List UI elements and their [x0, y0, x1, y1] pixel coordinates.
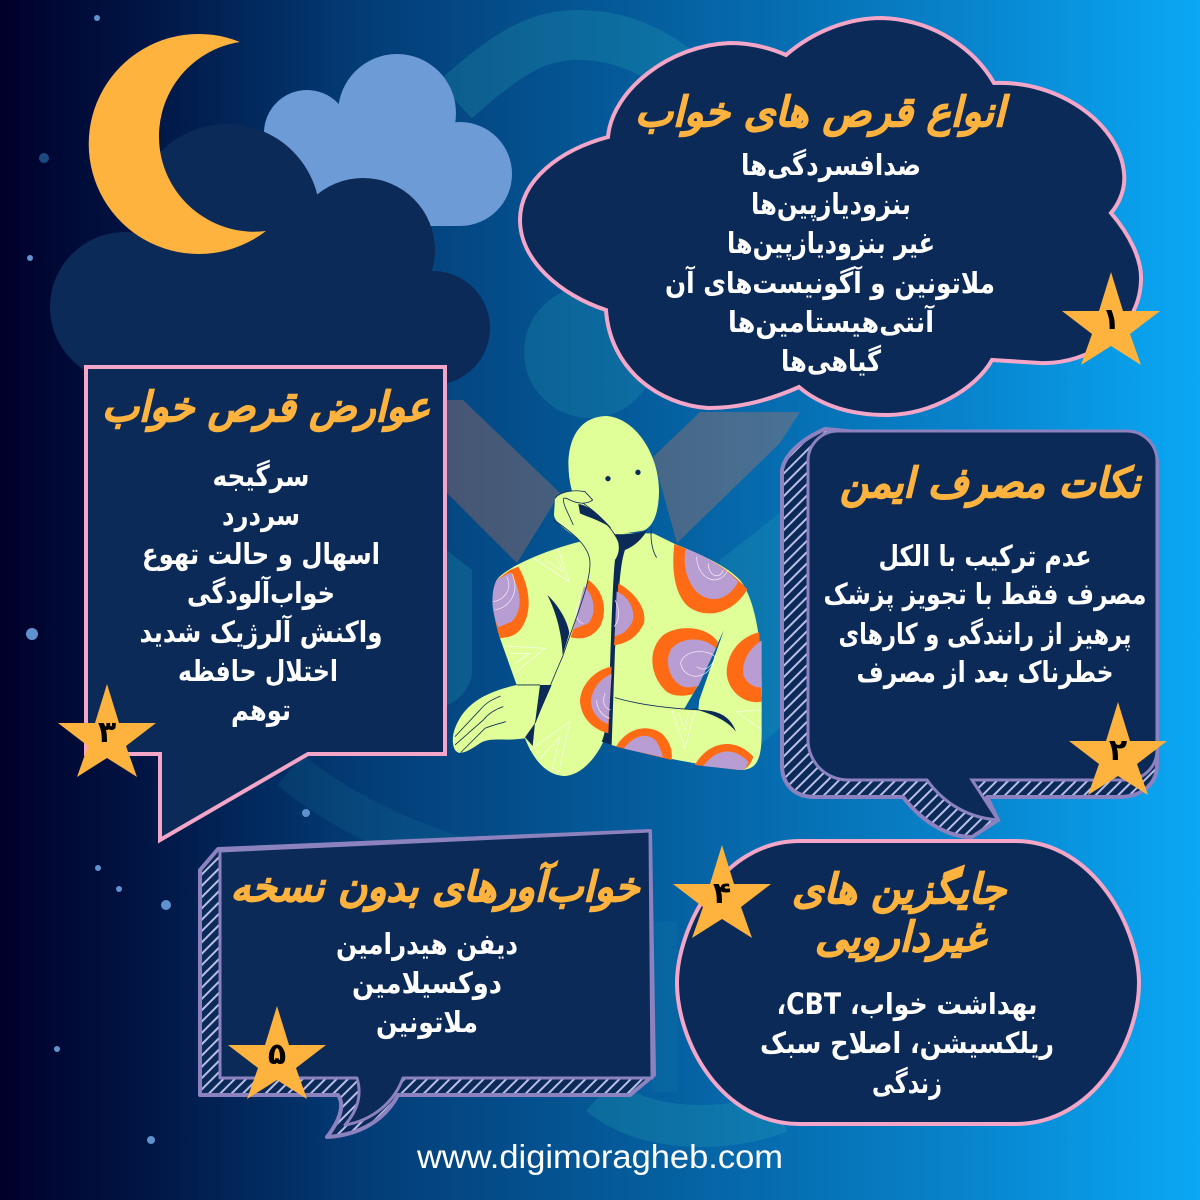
description: بهداشت خواب، CBT،	[776, 987, 1038, 1021]
star badge 5	[228, 1006, 326, 1099]
star badge 5: ۵	[268, 1037, 286, 1072]
faint logo shapes	[455, 35, 780, 1126]
heading: جایگزین های	[792, 865, 1008, 914]
list: سرگیجه	[212, 459, 310, 493]
heading: عوارض قرص خواب	[102, 383, 430, 432]
list: اسهال و حالت تهوع	[142, 537, 380, 571]
head	[568, 416, 659, 534]
hatched shadow	[200, 831, 654, 1137]
heading: خواب‌آورهای بدون نسخه	[230, 860, 641, 912]
list: آنتی‌هیستامین‌ها	[728, 304, 935, 339]
night sky dots	[26, 15, 310, 1144]
star badge 1	[1062, 272, 1160, 365]
orange and purple patterns	[492, 544, 762, 770]
speech box	[86, 367, 445, 840]
panel 5: over the counter	[200, 831, 654, 1137]
list: اختلال حافظه	[178, 654, 338, 688]
eyes	[605, 470, 641, 481]
heading: نکات مصرف ایمن	[840, 459, 1142, 508]
icon: crescent moon	[89, 34, 266, 254]
rounded box	[677, 841, 1139, 1124]
list	[140, 459, 382, 727]
panel 1: types of sleeping pills	[520, 18, 1160, 415]
star badge 3: ۳	[98, 715, 116, 750]
cloud bubble	[520, 18, 1141, 415]
description	[760, 987, 1054, 1100]
body	[453, 491, 762, 776]
heading: انواع قرص های خواب	[635, 88, 1010, 137]
neck and shadows	[525, 504, 736, 746]
list: ملاتونین	[376, 1005, 478, 1039]
star badge 3	[58, 684, 156, 777]
hatched shadow	[782, 429, 1157, 837]
tips: عدم ترکیب با الکل	[878, 539, 1092, 573]
list: واکنش آلرژیک شدید	[140, 614, 382, 649]
list: خواب‌آلودگی	[187, 575, 335, 610]
description: زندگی	[872, 1066, 942, 1100]
list	[665, 148, 995, 378]
star badge 2: ۲	[1109, 733, 1127, 768]
white and dark line details	[493, 550, 762, 773]
heading: غیردارویی	[815, 913, 988, 962]
list: غیر بنزودیازپین‌ها	[727, 226, 935, 261]
tips	[824, 539, 1146, 689]
icon: dark cloud	[50, 124, 490, 385]
list: ملاتونین و آگونیست‌های آن	[665, 265, 995, 300]
speech box	[808, 431, 1157, 820]
panel 2: safe use tips	[782, 429, 1167, 837]
description: ریلکسیشن، اصلاح سبک	[760, 1026, 1054, 1060]
star badge 4	[673, 845, 771, 938]
website url: www.digimoragheb.com	[416, 1138, 783, 1175]
tips: خطرناک بعد از مصرف	[856, 655, 1114, 689]
list: ضدافسردگی‌ها	[741, 148, 921, 182]
star badge 2	[1069, 702, 1167, 795]
list	[336, 927, 518, 1039]
heading	[792, 865, 1008, 962]
grey crossing bands	[420, 400, 800, 563]
panel 4: non-drug alternatives	[673, 841, 1139, 1124]
illustration: thinking person	[453, 416, 762, 776]
list: گیاهی‌ها	[781, 344, 881, 378]
speech box	[220, 831, 652, 1125]
icon: light blue cloud	[264, 54, 512, 226]
faint logo fills	[440, 286, 790, 1092]
list: دیفن هیدرامین	[336, 927, 518, 961]
list: بنزودیازپین‌ها	[751, 187, 911, 222]
star badge 1: ۱	[1102, 302, 1120, 337]
list: دوکسیلامین	[352, 966, 502, 1000]
faint lower arc	[290, 770, 560, 878]
list: توهم	[231, 693, 291, 727]
panel 3: side effects	[58, 367, 445, 840]
list: سردرد	[222, 498, 300, 532]
star badge 4: ۴	[713, 876, 731, 911]
